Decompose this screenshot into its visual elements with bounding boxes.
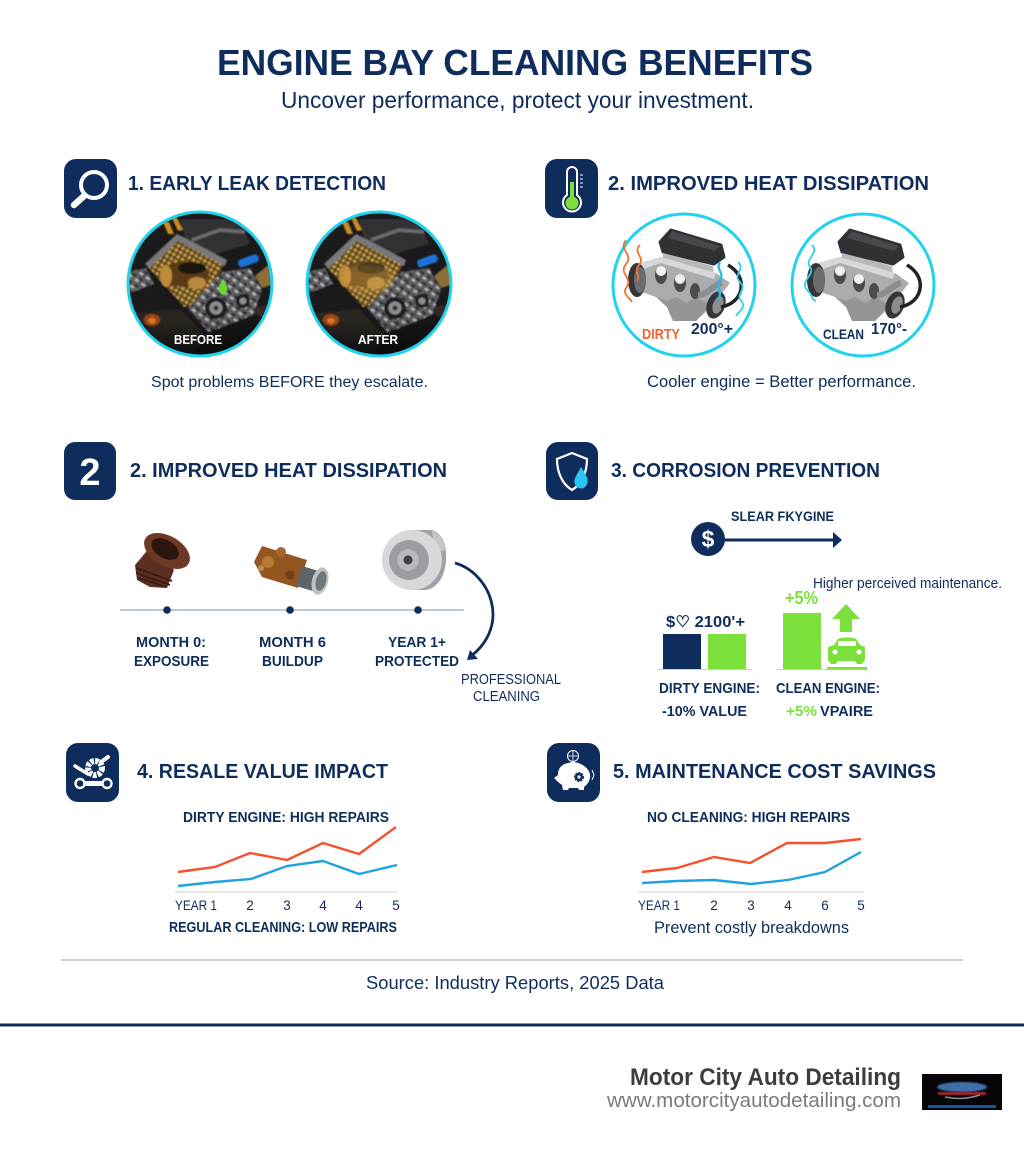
line chart: repairs by year: 2 xyxy=(246,898,254,913)
label: dirty engine value: DIRTY ENGINE: xyxy=(659,680,760,697)
panel: resale value impact xyxy=(66,743,400,936)
after engine photo xyxy=(304,209,454,359)
chart label: no cleaning: NO CLEANING: HIGH REPAIRS xyxy=(647,809,850,826)
line chart: repairs by year: 5 xyxy=(857,898,865,913)
panel: early leak detection xyxy=(64,159,454,391)
bar chart: clean engine xyxy=(777,588,869,670)
label: clean engine value: +5% xyxy=(786,703,817,720)
label: professional cleaning xyxy=(461,672,561,705)
label: dirty engine value: -10% VALUE xyxy=(662,703,747,720)
rusty plug xyxy=(135,526,196,588)
clean metal hub xyxy=(382,530,447,590)
after engine photo: AFTER xyxy=(358,332,399,347)
panel: maintenance cost savings xyxy=(547,743,936,937)
note: Higher perceived maintenance. xyxy=(813,575,1002,592)
label: month 6: MONTH 6 xyxy=(259,634,326,651)
footer website: www.motorcityautodetailing.com xyxy=(606,1090,901,1112)
heading: 4. RESALE VALUE IMPACT xyxy=(137,761,388,783)
clean engine illustration: 170°- xyxy=(871,321,907,338)
icon: number 2: 2 xyxy=(79,452,101,494)
icon: number 2 xyxy=(64,442,116,500)
label: year 1: PROTECTED xyxy=(375,653,459,670)
heading: 3. CORROSION PREVENTION xyxy=(611,460,880,482)
icon: wrench and gear xyxy=(66,743,119,802)
label: year 1 xyxy=(375,634,459,670)
line chart: repairs by year: 4 xyxy=(355,898,363,913)
label: month 0: EXPOSURE xyxy=(134,653,209,670)
footer brand name: Motor City Auto Detailing xyxy=(630,1064,901,1091)
label: month 0: MONTH 0: xyxy=(136,634,206,651)
line chart: repairs by year: YEAR 1 xyxy=(638,898,680,913)
caption: Spot problems BEFORE they escalate. xyxy=(151,374,428,391)
footer logo xyxy=(922,1074,1002,1110)
line chart: repairs by year: 4 xyxy=(784,898,792,913)
chart label: dirty engine: DIRTY ENGINE: HIGH REPAIRS xyxy=(183,809,389,826)
heading: 2. IMPROVED HEAT DISSIPATION xyxy=(130,460,447,482)
bar chart: dirty engine xyxy=(657,614,752,670)
dollar arrow xyxy=(691,522,842,556)
clean engine illustration xyxy=(792,214,934,356)
label: year 1: YEAR 1+ xyxy=(388,634,446,651)
heading: 5. MAINTENANCE COST SAVINGS xyxy=(613,761,936,783)
caption: Cooler engine = Better performance. xyxy=(647,373,916,391)
dollar arrow: $ xyxy=(702,526,715,552)
label: clean engine value xyxy=(776,680,880,720)
label: professional cleaning: CLEANING xyxy=(473,689,540,705)
line chart: repairs by year: 4 xyxy=(319,898,327,913)
icon: piggy bank xyxy=(547,743,600,802)
label: professional cleaning: PROFESSIONAL xyxy=(461,672,561,688)
line chart: repairs by year: YEAR 1 xyxy=(175,898,217,913)
icon: thermometer xyxy=(545,159,598,218)
line chart: repairs by year: 3 xyxy=(283,898,291,913)
before engine photo: BEFORE xyxy=(174,332,222,347)
bar chart: clean engine: +5% xyxy=(785,588,818,608)
icon: shield and drop xyxy=(546,442,598,500)
before engine photo xyxy=(125,209,275,359)
label: month 6: BUILDUP xyxy=(262,653,323,670)
line chart: repairs by year: 3 xyxy=(747,898,755,913)
clean engine illustration: CLEAN xyxy=(823,326,864,342)
dirty engine illustration xyxy=(613,214,755,356)
line chart: repairs by year: 5 xyxy=(392,898,400,913)
caption: Prevent costly breakdowns xyxy=(654,918,849,937)
timeline axis xyxy=(120,606,464,614)
dirty engine illustration: 200°+ xyxy=(691,321,733,338)
dirty engine illustration: DIRTY xyxy=(642,326,680,343)
icon: car xyxy=(827,638,867,670)
line chart: repairs by year: 6 xyxy=(821,898,829,913)
label: arrow caption: SLEAR FKYGINE xyxy=(731,509,834,524)
panel: corrosion prevention xyxy=(546,442,1002,720)
label: month 6 xyxy=(259,634,326,670)
icon: green up arrow xyxy=(832,604,860,632)
panel: improved heat dissipation, thermal xyxy=(545,159,934,391)
line chart: repairs by year: 2 xyxy=(710,898,718,913)
chart label: regular cleaning: REGULAR CLEANING: LOW REPAIRS xyxy=(169,919,397,936)
title: ENGINE BAY CLEANING BENEFITS xyxy=(217,42,813,83)
heading: 2. IMPROVED HEAT DISSIPATION xyxy=(608,173,929,195)
line chart: repairs by year xyxy=(638,839,865,913)
subtitle: Uncover performance, protect your investment. xyxy=(281,87,754,113)
icon: magnifying glass xyxy=(64,159,117,218)
source note: Source: Industry Reports, 2025 Data xyxy=(366,972,665,993)
bar chart: dirty engine: $♡ 2100'+ xyxy=(666,614,745,631)
arrow: professional cleaning xyxy=(455,563,493,660)
panel: corrosion timeline xyxy=(64,442,561,705)
label: dirty engine value xyxy=(659,680,760,720)
label: clean engine value: CLEAN ENGINE: xyxy=(776,680,880,697)
heading: 1. EARLY LEAK DETECTION xyxy=(128,173,386,195)
label: month 0 xyxy=(134,634,209,670)
rusted fitting xyxy=(254,546,331,597)
label: clean engine value: VPAIRE xyxy=(820,703,873,720)
line chart: repairs by year xyxy=(175,827,400,913)
